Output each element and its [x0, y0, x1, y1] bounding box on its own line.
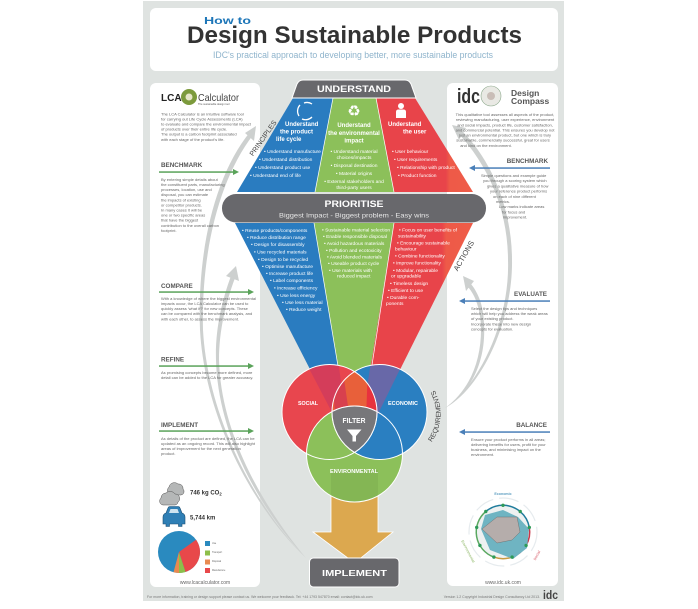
text: benchmark: you through a scoring system which [483, 178, 547, 183]
logo: idc design compass [457, 86, 550, 108]
icon: car [163, 506, 185, 526]
bullets: environmental impact: third-party users [336, 185, 372, 191]
text: benchmark: or competitor products. [161, 202, 202, 207]
bullets: red actions: • Modular, repairable [393, 268, 438, 274]
text: compass intro: This qualitative tool assesses all aspects of the product, [456, 112, 554, 117]
bullets: red actions: • Combine functionality [395, 254, 445, 260]
text: benchmark: for focus and [502, 210, 525, 214]
text: compare: quickly assess 'what if?' for new concepts. These [161, 306, 249, 311]
footer: copyright: Version 1.2 Copyright Industrial Design Consultancy Ltd 2013. [444, 595, 540, 599]
banner: prioritise: PRIORITISE [324, 199, 384, 210]
text: LCA intro: of products over their entire life cycle. [161, 126, 227, 132]
text: compass intro: and kind on the environment. [460, 143, 512, 148]
heading: how to: How to [204, 16, 251, 27]
venn: filter centre [332, 406, 377, 452]
stat: CO2: 2 [219, 492, 222, 496]
text: the user: the user [403, 130, 427, 136]
stat: distance: 5,744 km [190, 516, 215, 522]
panel: title [150, 8, 558, 71]
text: benchmark: Simple questions and example guide [481, 173, 547, 178]
link: idc website: www.idc.uk.com [485, 580, 521, 586]
heading: compare: COMPARE [161, 283, 193, 290]
bullets: environmental impact: choices/impacts [337, 155, 372, 161]
bullets: red actions: sustainability [398, 234, 427, 240]
venn: environmental circle [307, 412, 402, 502]
text: the user: Understand [388, 122, 422, 128]
bullets: green actions: • Enable responsible disposal [323, 234, 387, 240]
text: compare: can be compared with the benchmark analysis, and [161, 311, 252, 316]
arrow: balance [459, 429, 550, 435]
bullets: blue actions: • Reuse products/components [242, 228, 308, 234]
text: refine: As promising concepts become more defined, more [161, 370, 253, 375]
logo: LCA Calculator: The sustainable design tool [198, 102, 230, 106]
text: implement: areas of improvement for the next generation [161, 446, 241, 451]
bullets: green actions: • Use materials with [329, 268, 372, 274]
bullets: blue actions: • Design to be recycled [258, 257, 308, 263]
icon: user [396, 103, 406, 118]
bullets: red actions: ponents [386, 301, 404, 307]
text: benchmark: footprint. [161, 228, 177, 233]
funnel: actions [235, 223, 473, 420]
bullets: blue actions: • Reduce weight [286, 307, 322, 313]
logo: idc design compass: Design [511, 88, 539, 98]
label: actions: ACTIONS [452, 239, 476, 272]
logo: LCA Calculator [161, 89, 239, 106]
bullets: red actions: • Durable com- [387, 295, 420, 301]
text: benchmark: contribution to the overall carbon [161, 223, 219, 228]
panel: design compass background [447, 83, 558, 586]
text: LCA intro: The output is a carbon footprint associated [161, 132, 237, 136]
text: benchmark: that have the biggest [161, 218, 199, 223]
bullets: product life cycle: • Understand manufacture [264, 149, 321, 155]
heading: main title: Design Sustainable Products [187, 22, 522, 49]
text: evaluate: concepts for evaluation. [471, 326, 513, 332]
bullets: blue actions: • Reduce distribution range [247, 235, 306, 241]
text: evaluate: of your existing product. [471, 316, 513, 321]
banner: prioritise [222, 194, 486, 222]
chart: design compass radar: Economic [494, 492, 512, 496]
text: benchmark: on each of nine different [493, 194, 537, 199]
bullets: green actions: • Avoid blended materials [327, 254, 382, 260]
bullets: green actions: • Sustainable material selection [322, 228, 390, 234]
bullets: blue actions: • Increase efficiency [274, 286, 318, 292]
text: implement: updated as an ongoing record. This will also highlight [161, 441, 256, 446]
panel: left column text [158, 89, 256, 586]
link: lca website: www.lcacalculator.com [180, 580, 230, 586]
bullets: red actions: • Timeless design [390, 281, 428, 287]
text: balance: business, and minimising impact on the [471, 447, 542, 452]
text: environmental impact [324, 123, 384, 191]
label: implement box: IMPLEMENT [322, 568, 388, 578]
bullets: product life cycle: • Understand product use [255, 165, 311, 171]
heading: balance: BALANCE [516, 422, 547, 429]
text: compass intro: sustainable, commercially successful, great for users [456, 138, 550, 142]
bullets: blue actions: • Increase product life [266, 271, 313, 277]
venn: social economic overlap [332, 372, 376, 411]
heading: evaluate: EVALUATE [514, 291, 547, 298]
logo: LCA Calculator: Calculator [198, 92, 239, 104]
bullets: product life cycle: • Understand distribution [259, 157, 313, 163]
venn: social circle [282, 365, 354, 453]
logo: idc design compass: Compass [511, 96, 550, 106]
funnel: understand [237, 98, 473, 192]
text: benchmark: improvement. [503, 214, 527, 220]
arrow: benchmark [159, 169, 239, 175]
chart: carbon pie [158, 531, 200, 573]
text: benchmark: the constituent parts, manufacturing [161, 182, 225, 187]
arrow: compare [159, 289, 254, 295]
text: environmental impact: impact [344, 138, 364, 144]
arrow: evaluate [459, 298, 550, 304]
text: environmental impact: the environmental [328, 131, 380, 137]
footer: idc logo: idc [543, 588, 558, 602]
venn: filter centre: FILTER [342, 416, 366, 425]
icon: clouds [160, 483, 184, 505]
banner: prioritise: Biggest Impact - Biggest problem - Easy wins [279, 212, 430, 220]
chart legend: Manufacture [212, 569, 226, 572]
heading: benchmark: BENCHMARK [507, 158, 548, 165]
bullets: product life cycle: • Understand end of life [250, 173, 301, 179]
venn: economic circle [356, 365, 426, 459]
text: product life cycle: life cycle [276, 137, 302, 143]
bullets: green actions: • Avoid hazardous materials [324, 241, 385, 247]
heading: refine: REFINE [161, 356, 184, 364]
poster [143, 1, 564, 601]
bullets: red actions: behaviour [395, 246, 417, 252]
text: benchmark: Low marks indicate areas [499, 204, 544, 209]
logo: LCA Calculator: LCA [161, 93, 182, 104]
heading: implement: IMPLEMENT [161, 422, 198, 429]
text: product life cycle: Understand [285, 122, 319, 128]
text: product life cycle [250, 122, 321, 179]
heading: understand [292, 80, 416, 98]
subtitle: IDC's practical approach to developing better, more sustainable products [213, 50, 493, 61]
arrow: benchmark [469, 165, 550, 171]
bullets: blue actions: • Use less energy [277, 293, 316, 299]
text: benchmark: the impacts of existing [161, 197, 201, 202]
text: product life cycle: the product [280, 130, 313, 136]
chart: design compass radar [460, 492, 541, 566]
bullets: red actions: • Improve functionality [393, 260, 441, 266]
text: balance: delivering benefits for users, profit for your [471, 442, 546, 447]
text: evaluate: which will help you address the weak areas [471, 311, 548, 316]
text: LCA intro: for carrying out Life Cycle Assessments (LCA) [161, 116, 243, 122]
chart legend: Disposal [212, 560, 222, 563]
text: LCA intro: with each stage of the product's life. [161, 137, 224, 142]
text: the user [388, 122, 455, 179]
text: balance: environment. [471, 452, 494, 457]
arrow: implement [313, 470, 393, 563]
text: LCA intro: The LCA Calculator is an intuitive software tool [161, 112, 244, 116]
icon: funnel [347, 430, 362, 442]
bullets: red actions: • Encourage sustainable [397, 240, 450, 246]
text: compass intro: and social impacts, product life, customer satisfaction, [457, 122, 553, 128]
chart: design compass radar: Environmental [460, 540, 476, 563]
chart legend: Use [212, 542, 217, 545]
bullets: the user: • User requirements [394, 157, 438, 163]
text: implement: product. [161, 451, 175, 456]
footer: contact: For more information, training or design support please contact us. We welcome your feedback. Tel: +44 1793 547870 email: contact@idc.uk.com [147, 595, 373, 599]
label: implement box [310, 558, 399, 587]
arrows: principles curved [200, 126, 306, 558]
label: economic: ECONOMIC [388, 401, 419, 407]
bullets: red actions: • Focus on user benefits of [399, 228, 458, 234]
bullets: red actions: or upgradable [391, 274, 421, 280]
text: benchmark: gives a qualitative measure of how [487, 184, 548, 188]
bullets: blue actions: • Use recycled materials [254, 250, 307, 256]
bullets: the user: • User behaviour [392, 149, 429, 155]
text: benchmark: metrics. [496, 199, 510, 204]
bullets: blue actions: • Design for disassembly [251, 242, 305, 248]
bullets: blue actions: • Label components [270, 278, 314, 284]
label: social: SOCIAL [298, 401, 318, 407]
text: LCA intro: to evaluate and compare the environmental impact [161, 122, 252, 126]
text: refine: detail can be added to the LCA for greater accuracy. [161, 375, 253, 380]
panel: right column text [456, 86, 555, 586]
text: compare: With a knowledge of where the biggest environmental [161, 296, 256, 301]
text: benchmark: your reference product performs [490, 188, 547, 194]
bullets: green actions: • Useable product cycle [328, 261, 379, 267]
chart legend [205, 541, 226, 573]
bullets: environmental impact: • Material origins [336, 171, 373, 177]
text: benchmark: By entering simple details about [161, 177, 219, 182]
text: benchmark: one or two specific areas [161, 213, 205, 218]
heading: benchmark: BENCHMARK [161, 162, 203, 169]
icon: recycling: ♻ [347, 102, 361, 120]
bullets: the user: • Product function [398, 173, 437, 179]
panel: LCA calculator background [150, 83, 260, 587]
bullets: blue actions: • Optimise manufacture [262, 264, 313, 270]
text: environmental impact: Understand [337, 123, 371, 129]
heading: understand: UNDERSTAND [317, 84, 391, 95]
text: compass intro: and commercial potential. This ensures you develop not [456, 128, 555, 132]
bullets: red actions: • Efficient to use [388, 288, 423, 294]
label: principles: PRINCIPLES [249, 119, 279, 158]
text: benchmark: disposal, you can estimate [161, 192, 209, 197]
arrow: refine [159, 363, 254, 369]
label: environmental: ENVIRONMENTAL [330, 469, 378, 475]
text: compare: with each other, to assess the improvement. [161, 316, 239, 321]
arrows: actions curved [445, 125, 512, 408]
stat: CO2: 746 kg CO [190, 490, 219, 496]
bullets: environmental impact: • Disposal destination [331, 163, 378, 169]
icon: life cycle [298, 102, 312, 120]
venn outlines [282, 364, 427, 502]
text: evaluate: Select the design tips and techniques [471, 306, 537, 311]
text: benchmark: In many cases it will be [161, 208, 203, 212]
arrow: implement [159, 428, 254, 434]
chart: design compass radar: Social [533, 550, 541, 561]
text: compare: impacts occur, the LCA Calculator can be used to [161, 301, 249, 306]
logo: idc design compass: idc [457, 86, 480, 108]
label: requirements: REQUIREMENTS [428, 390, 441, 442]
text: benchmark: processes, location, use and [161, 187, 212, 192]
bullets: green actions: reduced impact [337, 274, 371, 280]
text: evaluate: Incorporate these into new design [471, 322, 531, 326]
bullets: blue actions: • Use less material [282, 300, 323, 306]
bullets: environmental impact: • Understand material [330, 149, 378, 155]
chart legend: Transport [212, 551, 222, 554]
bullets: environmental impact: • External stakeholders and [324, 179, 384, 185]
bullets: the user: • Relationship with product [397, 165, 455, 171]
bullets: green actions: • Pollution and ecotoxicity [326, 248, 382, 254]
text: compass intro: reviewing manufacturing, user experience, environment [456, 117, 555, 122]
text: balance: Ensure your product performs in all areas; [471, 437, 545, 442]
text: compass intro: just an environmental product, but one which is truly [458, 132, 551, 138]
text: implement: As details of the product are defined, the LCA can be [161, 436, 255, 441]
